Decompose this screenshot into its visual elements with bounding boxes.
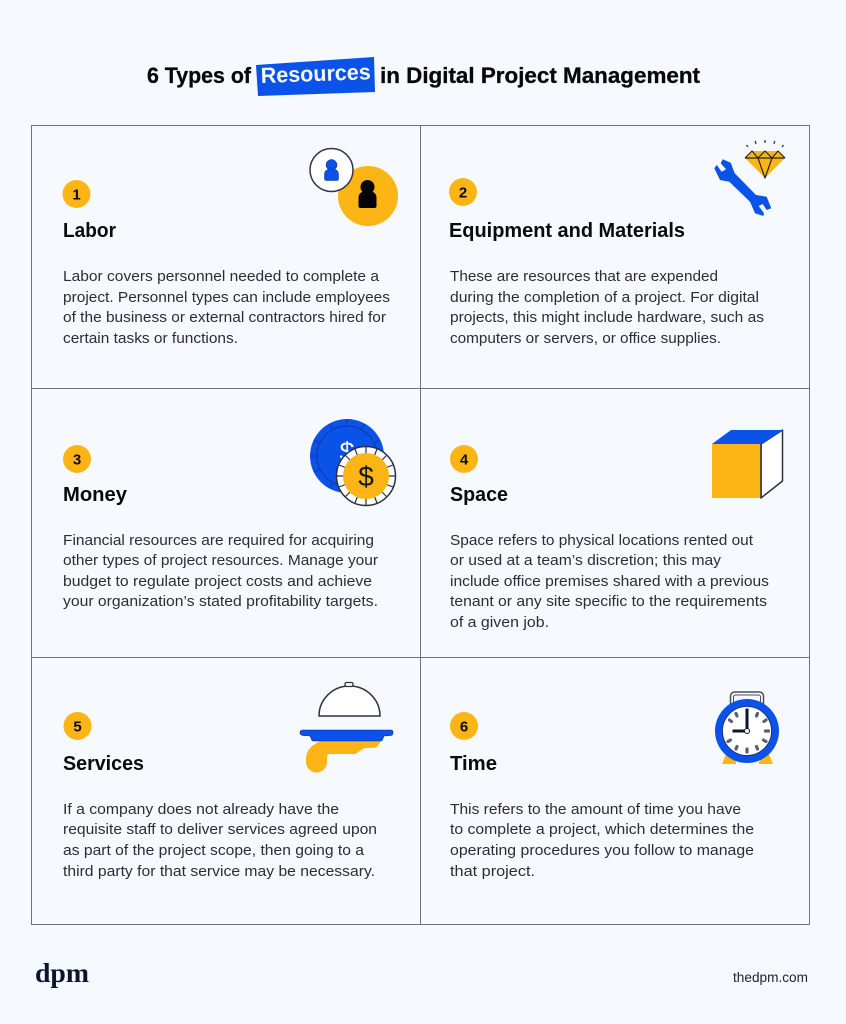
- text: equipment description: These are resources that are expended: [450, 268, 718, 285]
- badge 5: [64, 712, 92, 740]
- text: labor description: certain tasks or functions.: [63, 330, 238, 347]
- text: services description: third party for that service may be necessary.: [63, 863, 375, 880]
- text: equipment description: during the completion of a project. For digital: [450, 289, 759, 306]
- text: money description: other types of project resources. Manage your: [63, 552, 378, 569]
- title highlight: Resources: Resources: [260, 59, 371, 88]
- icon: coins: $: [358, 461, 374, 492]
- title: [147, 57, 701, 96]
- badge 4: 4: [460, 452, 469, 468]
- text: time description: operating procedures you follow to manage: [450, 842, 754, 859]
- text: equipment description: projects, this might include hardware, such as: [450, 309, 764, 326]
- badge 2: 2: [459, 184, 467, 202]
- icon: wrench and diamond: [714, 140, 785, 216]
- icon: serving tray and hand: [300, 682, 393, 772]
- logo: dpm: dpm: [35, 958, 90, 988]
- badge 5: 5: [73, 718, 82, 736]
- panel: space: [450, 430, 783, 631]
- badge 1: 1: [72, 186, 81, 204]
- icon: cube: [712, 430, 783, 498]
- text: time description: This refers to the amount of time you have: [450, 801, 741, 818]
- panel: labor: [62, 148, 398, 347]
- text: labor description: Labor covers personnel needed to complete a: [63, 268, 380, 285]
- badge 4: [450, 445, 478, 473]
- heading: space: Space: [450, 484, 508, 506]
- text: space description: of a given job.: [450, 614, 549, 631]
- text: services description: [63, 801, 377, 880]
- heading: labor: Labor: [63, 220, 116, 242]
- icon: alarm clock: [715, 692, 779, 764]
- panel: services: [63, 682, 393, 880]
- text: labor description: [63, 268, 390, 347]
- heading: money: Money: [63, 484, 128, 506]
- text: equipment description: computers or servers, or office supplies.: [450, 330, 721, 347]
- text: space description: tenant or any site specific to the requirements: [450, 593, 767, 610]
- text: time description: [450, 801, 754, 880]
- footer url: thedpm.com: [733, 970, 808, 985]
- grid lines: [31, 125, 810, 924]
- badge 2: [449, 178, 477, 206]
- panel: equipment and materials: [449, 140, 785, 347]
- text: money description: [63, 532, 378, 610]
- badge 6: 6: [460, 718, 468, 736]
- text: labor description: of the business or external contractors hired for: [63, 309, 386, 326]
- text: services description: If a company does not already have the: [63, 801, 339, 818]
- panel: time: [450, 692, 779, 880]
- text: space description: [450, 532, 769, 631]
- icon: coins: $: [339, 437, 355, 467]
- text: time description: to complete a project, which determines the: [450, 821, 754, 838]
- heading: services: Services: [63, 753, 144, 775]
- badge 1: [62, 180, 90, 208]
- heading: equipment and materials: Equipment and Materials: [449, 220, 685, 242]
- badge 6: [450, 712, 478, 740]
- text: space description: include office premises shared with a previous: [450, 573, 769, 590]
- badge 3: [63, 445, 91, 473]
- title: 6 Types of: [147, 63, 252, 88]
- badge 3: 3: [73, 452, 81, 468]
- text: money description: budget to regulate project costs and achieve: [63, 573, 372, 590]
- icon: people: [310, 148, 398, 226]
- title: in Digital Project Management: [380, 63, 701, 88]
- text: labor description: project. Personnel types can include employees: [63, 289, 390, 306]
- text: time description: that project.: [450, 863, 535, 880]
- text: services description: requisite staff to deliver services agreed upon: [63, 821, 377, 838]
- text: equipment description: [450, 268, 764, 347]
- panel: money: [63, 419, 396, 610]
- text: services description: as part of the project scope, then going to a: [63, 842, 365, 859]
- text: space description: Space refers to physical locations rented out: [450, 532, 754, 549]
- text: money description: your organization’s stated profitability targets.: [63, 593, 378, 610]
- icon: coins: [310, 419, 396, 506]
- heading: time: Time: [450, 753, 497, 775]
- text: money description: Financial resources are required for acquiring: [63, 532, 374, 549]
- text: space description: or used at a team’s discretion; this may: [450, 552, 722, 569]
